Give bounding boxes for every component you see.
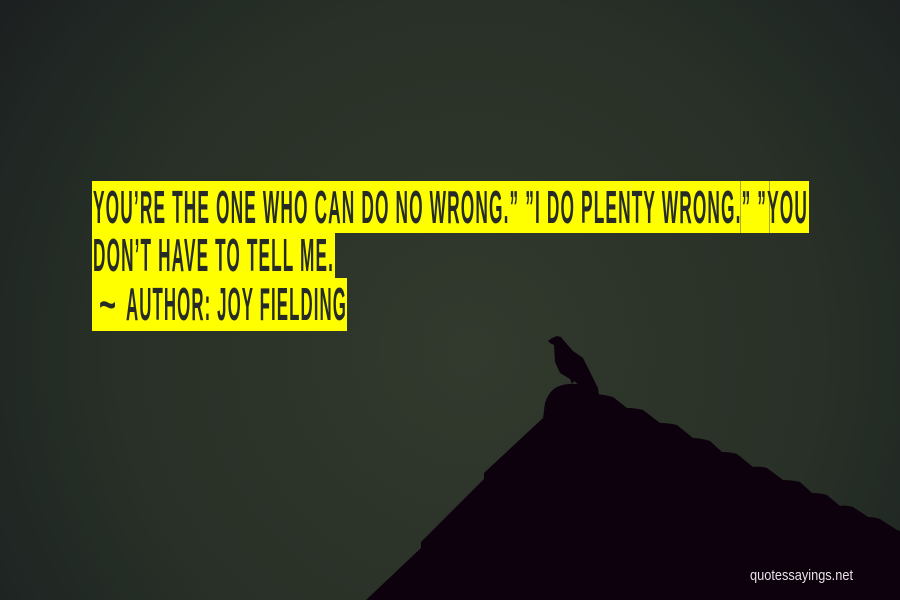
highlight: line 1 (92, 181, 809, 233)
highlight: line 2 (92, 233, 335, 278)
quote highlight block: AUTHOR: JOY FIELDING (126, 278, 347, 330)
author tilde: ~ (99, 278, 118, 330)
watermark: quotessayings.net (750, 568, 853, 584)
silhouette: bird (548, 336, 599, 396)
silhouette: roof (366, 384, 900, 600)
highlight: line 3 (92, 278, 347, 331)
quote highlight block: DON’T HAVE TO TELL ME. (93, 229, 334, 281)
quote highlight block (92, 181, 809, 331)
